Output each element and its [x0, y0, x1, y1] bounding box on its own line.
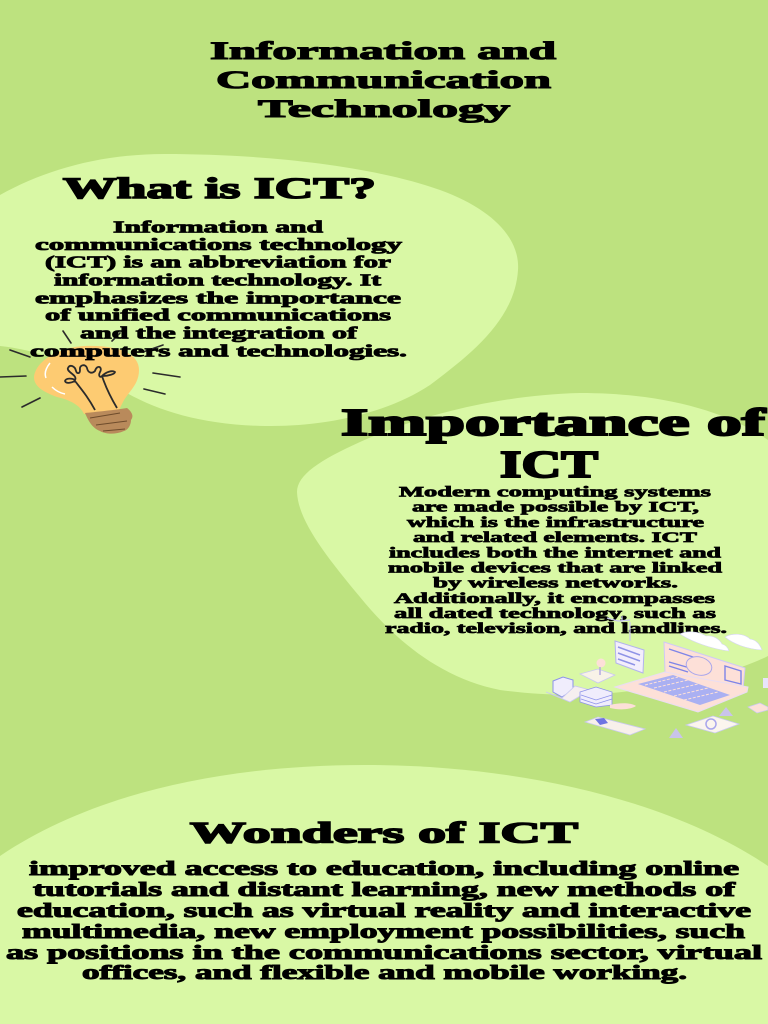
- wonders of ICT body text: improved access to education, including online: [29, 858, 739, 880]
- wonders of ICT body text: as positions in the communications sector, virtual: [6, 942, 763, 964]
- importance of ICT body text: which is the infrastructure: [407, 515, 705, 531]
- icon: laptop magnifier: [684, 654, 714, 678]
- wonders of ICT body text: [6, 858, 763, 984]
- icon: plug: [610, 703, 636, 709]
- icon: bulb highlight: [45, 363, 65, 394]
- what is ICT body text: (ICT) is an abbreviation for: [45, 252, 392, 272]
- what is ICT body text: [30, 218, 407, 360]
- what is ICT body text: emphasizes the importance: [35, 288, 402, 308]
- title: Information and: [210, 38, 556, 65]
- icon: bulb rays: [0, 331, 180, 407]
- importance of ICT body text: radio, television, and landlines.: [385, 621, 727, 637]
- what is ICT body text: communications technology: [35, 235, 403, 254]
- title: Technology: [258, 96, 511, 123]
- wonders of ICT body text: education, such as virtual reality and interactive: [17, 900, 751, 922]
- wonders of ICT body text: offices, and flexible and mobile working.: [82, 962, 687, 984]
- importance of ICT body text: includes both the internet and: [389, 546, 722, 562]
- icon: bulb glass: [34, 346, 139, 414]
- icon: floating document: [615, 641, 644, 673]
- what is ICT body text: Information and: [113, 218, 324, 236]
- icon: drone: [607, 616, 630, 641]
- importance of ICT body text: Modern computing systems: [399, 484, 711, 500]
- importance of ICT body text: all dated technology, such as: [394, 606, 716, 622]
- icon: light bulb: [0, 331, 180, 434]
- panel: wonders of ICT blob: [0, 765, 768, 1024]
- what is ICT heading: What is ICT?: [63, 172, 376, 205]
- importance of ICT heading: Importance of: [341, 402, 767, 444]
- icon: bulb base: [85, 408, 132, 434]
- what is ICT body text: and the integration of: [80, 324, 358, 342]
- importance of ICT body text: are made possible by ICT,: [412, 500, 699, 516]
- panel: what is ICT blob: [0, 154, 518, 426]
- title: Communication: [216, 67, 551, 94]
- what is ICT body text: of unified communications: [45, 306, 392, 324]
- icon: laptop screen: [664, 642, 745, 690]
- importance of ICT body text: [385, 484, 727, 637]
- title: [210, 38, 556, 123]
- icon: laptop illustration: [546, 616, 768, 738]
- icon: clouds: [680, 632, 762, 651]
- icon: small panels: [585, 717, 645, 735]
- icon: joystick pad: [580, 669, 615, 683]
- icon: laptop base: [615, 672, 748, 712]
- importance of ICT heading: [341, 402, 767, 486]
- importance of ICT body text: by wireless networks.: [433, 576, 678, 592]
- what is ICT body text: information technology. It: [54, 270, 382, 290]
- what is ICT body text: computers and technologies.: [30, 342, 407, 360]
- importance of ICT body text: Additionally, it encompasses: [394, 591, 715, 607]
- icon: bulb filament: [65, 365, 117, 410]
- importance of ICT body text: and related elements. ICT: [413, 530, 697, 546]
- wonders of ICT heading: Wonders of ICT: [190, 816, 578, 850]
- importance of ICT body text: mobile devices that are linked: [388, 560, 723, 576]
- wonders of ICT body text: multimedia, new employment possibilities, such: [22, 921, 746, 943]
- importance of ICT heading: ICT: [500, 444, 598, 486]
- wonders of ICT body text: tutorials and distant learning, new methods of: [33, 879, 737, 901]
- panel: importance of ICT blob: [297, 393, 768, 695]
- icon: blocks and stack: [553, 677, 573, 697]
